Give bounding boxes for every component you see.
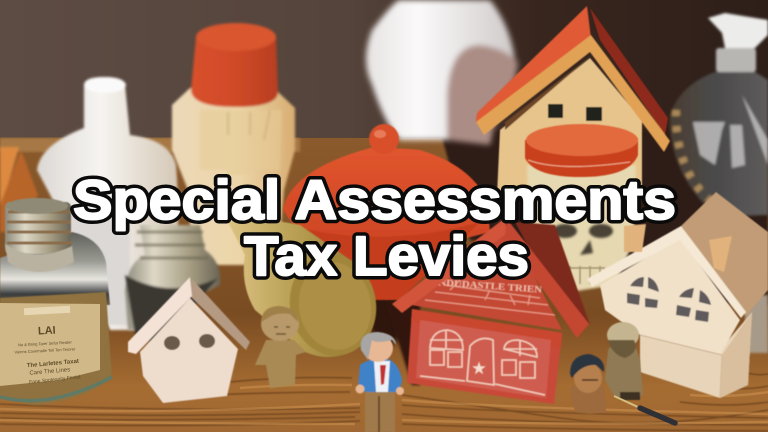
- back roof: [590, 8, 668, 135]
- can body: [0, 292, 112, 405]
- roof back face: [515, 222, 590, 325]
- pale box at right edge: [745, 295, 768, 353]
- object: silver bottle: [125, 225, 220, 345]
- background: wooden table: [0, 138, 768, 432]
- dark shadow behind central objects: [330, 240, 410, 350]
- dark shadow behind red house: [385, 300, 420, 385]
- windows: [548, 104, 563, 118]
- brown roof: [681, 192, 768, 316]
- object: metal can with label: [0, 198, 112, 405]
- object: gold cylinder: [228, 219, 384, 363]
- can shoulder: [0, 232, 110, 305]
- can label text: No & Bring Tarer Sefur Resiler: [18, 340, 73, 347]
- roof front: [128, 277, 192, 354]
- window right: [676, 288, 711, 322]
- can label text: The Larletes Taxat: [27, 359, 79, 369]
- vase arch reflection: [447, 45, 518, 145]
- object: red house with brick gable: [392, 218, 590, 404]
- can collar: [5, 244, 74, 272]
- dark background behind right side objects: [440, 130, 768, 305]
- jar lid: [525, 124, 638, 177]
- background: brown wall: [0, 0, 768, 150]
- can label text: Fane Spoteanity Fenitd: [29, 374, 81, 386]
- chimneys: [624, 224, 646, 252]
- can label text: LAI: [38, 325, 56, 337]
- red cap: [191, 38, 278, 107]
- object: wooden bottle with red cap: [172, 23, 295, 265]
- roof sides: [392, 218, 507, 313]
- body: [497, 58, 642, 195]
- object: tan house with red roof: [476, 6, 670, 195]
- house name: NDUDASTLE TRIEN: [438, 278, 543, 296]
- title line 1: Special Assessments: [73, 168, 676, 231]
- object: orange wooden block: [0, 147, 38, 232]
- gable: [405, 230, 562, 330]
- object: large white vase: [366, 0, 518, 145]
- figure: grey haired man in blue suit: [356, 332, 404, 432]
- title line 2 outline: Tax Levies: [244, 224, 529, 287]
- red roof: [476, 6, 591, 128]
- title line 2: Tax Levies: [244, 224, 529, 287]
- object: cream jar with skull: [525, 124, 638, 292]
- figure: gold soldier: [605, 322, 643, 400]
- roof edge: [587, 226, 746, 318]
- upper body: [600, 238, 740, 355]
- can label text: Vienns Covernalle Tiel Ten Terorer: [14, 346, 76, 355]
- can label: [0, 303, 100, 386]
- gable shadow: [505, 55, 592, 130]
- body: [140, 298, 238, 403]
- front wall: [407, 309, 562, 404]
- title line 1 outline: Special Assessments: [73, 168, 676, 231]
- holes: [164, 336, 180, 350]
- window left: [627, 277, 659, 308]
- skull jar body: [527, 165, 636, 292]
- gable brick pattern: [425, 280, 555, 315]
- can label text: [14, 325, 81, 386]
- roof back: [190, 279, 250, 350]
- figure: gold boy statue: [255, 306, 306, 388]
- object: cream house with brown roof: [587, 192, 768, 398]
- object: white bottle: [37, 77, 178, 330]
- title: [73, 168, 676, 287]
- object: white backing behind can: [68, 215, 130, 325]
- yellow eave: [476, 35, 670, 152]
- star: ★: [471, 359, 487, 378]
- can label text: Care The Lines: [29, 367, 71, 377]
- object: small white house: [128, 277, 250, 403]
- skull eyes and nose: [553, 224, 613, 255]
- object: red lidded bowl: [283, 124, 490, 300]
- figure: dark haired child: [570, 354, 606, 414]
- object: spray bottle: [670, 13, 768, 216]
- doors and windows: [420, 330, 545, 395]
- lower body: [640, 312, 752, 398]
- object: screwdriver: [614, 396, 675, 423]
- can threads: [5, 198, 72, 254]
